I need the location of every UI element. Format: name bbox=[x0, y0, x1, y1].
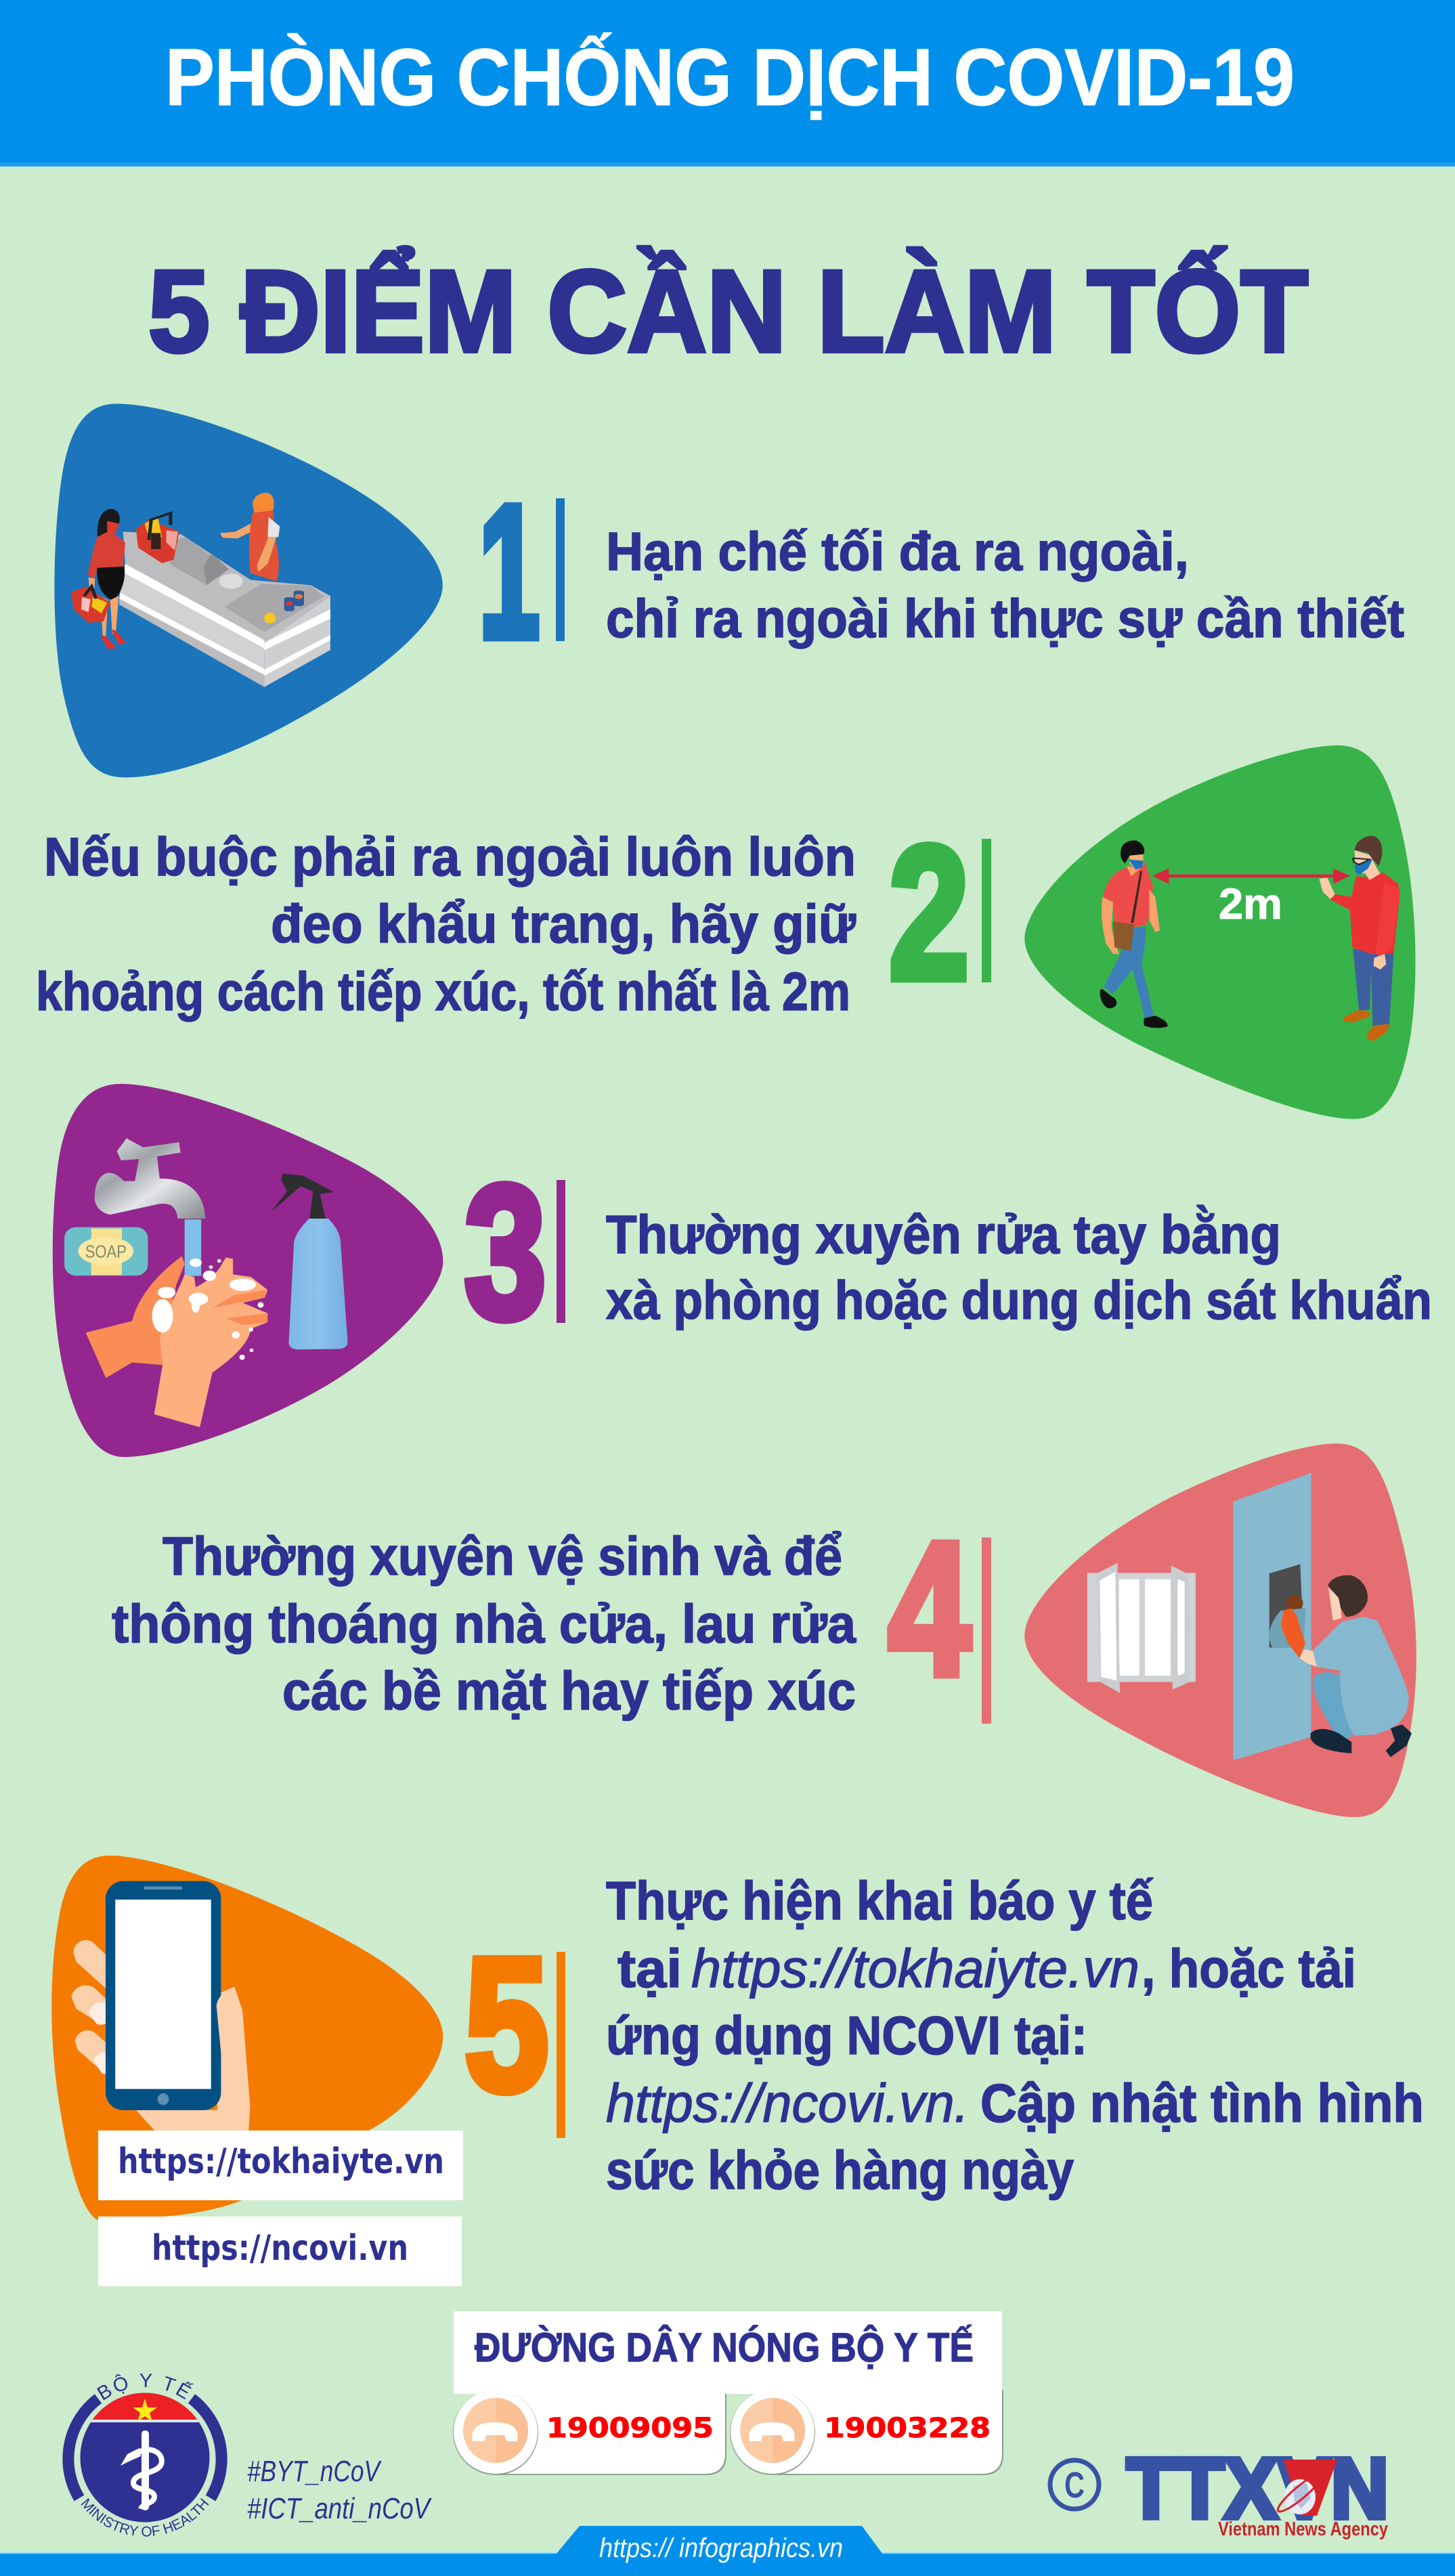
shopkeeper bbox=[220, 493, 280, 582]
illustration: hand washing on purple shape bbox=[53, 1084, 443, 1457]
logo: Ministry of Health bbox=[62, 2374, 227, 2537]
text: step 2: Nếu buộc phải ra ngoài luôn luôn bbox=[44, 827, 856, 887]
green shape bbox=[1024, 745, 1416, 1119]
text: step 5: https://tokhaiyte.vn bbox=[691, 1938, 1139, 1999]
text: step 1 bbox=[606, 521, 1404, 649]
hashtags: #ICT_anti_nCoV bbox=[247, 2492, 432, 2525]
hotline 1: 19009095 bbox=[546, 2413, 714, 2444]
number 3: 3 bbox=[464, 1146, 546, 1358]
hand bbox=[71, 1940, 250, 2131]
text: step 5: https://ncovi.vn. bbox=[606, 2073, 969, 2133]
number 2: 2 bbox=[889, 807, 969, 1019]
logo: TTXVN: TTXVN bbox=[1127, 2441, 1389, 2536]
text: step 1: Hạn chế tối đa ra ngoài, bbox=[606, 521, 1189, 582]
divider bar 2 bbox=[982, 839, 991, 982]
logo: Ministry of Health: MINISTRY OF HEALTH bbox=[81, 2498, 209, 2537]
person right bbox=[1319, 836, 1399, 1041]
purple shape bbox=[53, 1084, 443, 1457]
text: step 2 bbox=[36, 827, 856, 1022]
basket on counter bbox=[136, 513, 179, 563]
hand basket bbox=[71, 586, 110, 623]
logo: Ministry of Health: BỘ Y TẾ bbox=[97, 2374, 194, 2401]
text: step 3 bbox=[606, 1204, 1432, 1330]
smartphone bbox=[106, 1881, 221, 2110]
panel: step 5 bbox=[51, 1856, 1424, 2286]
panel: step 3 bbox=[53, 1084, 1432, 1457]
text: step 5: tại bbox=[617, 1938, 682, 1999]
counter bbox=[119, 531, 330, 687]
soap bar: SOAP bbox=[85, 1242, 127, 1261]
divider bar 3 bbox=[557, 1180, 565, 1323]
divider bar 4 bbox=[982, 1537, 991, 1724]
divider bar 1 bbox=[556, 498, 565, 641]
distance arrow bbox=[1152, 869, 1350, 884]
number 4: 4 bbox=[888, 1504, 970, 1715]
text: step 4: các bề mặt hay tiếp xúc bbox=[282, 1661, 856, 1721]
text: step 3: Thường xuyên rửa tay bằng bbox=[606, 1204, 1281, 1265]
link box: tokhaiyte: https://tokhaiyte.vn bbox=[118, 2141, 444, 2182]
water stream bbox=[185, 1219, 201, 1276]
text: step 2: khoảng cách tiếp xúc, tốt nhất là 2m bbox=[36, 961, 850, 1022]
illustration: two people 2 m apart on green shape bbox=[1024, 745, 1416, 1119]
illustration: cashier counter on blue shape bbox=[54, 403, 443, 777]
text: step 4 bbox=[112, 1526, 856, 1721]
hotline heading: ĐƯỜNG DÂY NÓNG BỘ Y TẾ bbox=[475, 2325, 974, 2370]
orange shape bbox=[51, 1856, 443, 2220]
washing hands bbox=[86, 1257, 267, 1427]
cleaner bbox=[1281, 1575, 1412, 1757]
text: step 5: ứng dụng NCOVI tại: bbox=[606, 2005, 1087, 2066]
text: step 4: Thường xuyên vệ sinh và để bbox=[162, 1526, 842, 1586]
faucet bbox=[95, 1138, 205, 1219]
customer bbox=[87, 509, 126, 649]
blue shape bbox=[54, 403, 443, 777]
hotline 2: 19003228 bbox=[824, 2413, 991, 2444]
number 5: 5 bbox=[464, 1918, 549, 2131]
spray bottle bbox=[270, 1173, 348, 1349]
text: step 1: chỉ ra ngoài khi thực sự cần thiết bbox=[606, 588, 1404, 649]
text: step 5 bbox=[606, 1871, 1424, 2200]
hotline 1 bbox=[453, 2390, 726, 2475]
panel: step 2 bbox=[36, 745, 1416, 1119]
number 1: 1 bbox=[479, 466, 540, 678]
illustration: phone in hand on orange shape bbox=[51, 1856, 443, 2220]
heading: 5 ĐIỂM CẦN LÀM TỐT bbox=[148, 246, 1308, 376]
text: step 5: sức khỏe hàng ngày bbox=[606, 2140, 1074, 2200]
panel: step 4 bbox=[112, 1443, 1416, 1817]
label: 2m: 2m bbox=[1219, 879, 1282, 928]
panel: step 1 bbox=[54, 403, 1404, 777]
red shape bbox=[1024, 1443, 1416, 1817]
title: PHÒNG CHỐNG DỊCH COVID-19 bbox=[165, 32, 1295, 123]
door bbox=[1233, 1472, 1311, 1760]
hashtags: #BYT_nCoV bbox=[247, 2455, 382, 2488]
person left bbox=[1100, 840, 1168, 1028]
soap bar bbox=[64, 1227, 148, 1275]
text: step 5: Thực hiện khai báo y tế bbox=[606, 1871, 1153, 1931]
footer url: https:// infographics.vn bbox=[599, 2533, 843, 2563]
copyright mark bbox=[1050, 2460, 1099, 2509]
footer bar bbox=[0, 2526, 1455, 2576]
link box: ncovi bbox=[98, 2217, 462, 2286]
illustration: cleaning a door and open window on red shape bbox=[1024, 1443, 1416, 1817]
link box: ncovi: https://ncovi.vn bbox=[152, 2228, 408, 2269]
header band bbox=[0, 0, 1455, 167]
hotline 2 bbox=[730, 2390, 1003, 2475]
hotline heading bbox=[454, 2311, 1002, 2394]
hotline panel bbox=[453, 2311, 1003, 2475]
copyright mark: C bbox=[1064, 2465, 1085, 2506]
logo: TTXVN: Vietnam News Agency bbox=[1218, 2518, 1388, 2540]
open window bbox=[1087, 1563, 1196, 1693]
hashtags bbox=[247, 2455, 432, 2525]
divider bar 5 bbox=[557, 1952, 565, 2138]
text: step 4: thông thoáng nhà cửa, lau rửa bbox=[112, 1594, 856, 1654]
text: step 5: Cập nhật tình hình bbox=[980, 2073, 1424, 2133]
text: step 2: đeo khẩu trang, hãy giữ bbox=[271, 894, 856, 954]
link box: tokhaiyte bbox=[98, 2131, 463, 2200]
text: step 5: , hoặc tải bbox=[1142, 1938, 1356, 1999]
